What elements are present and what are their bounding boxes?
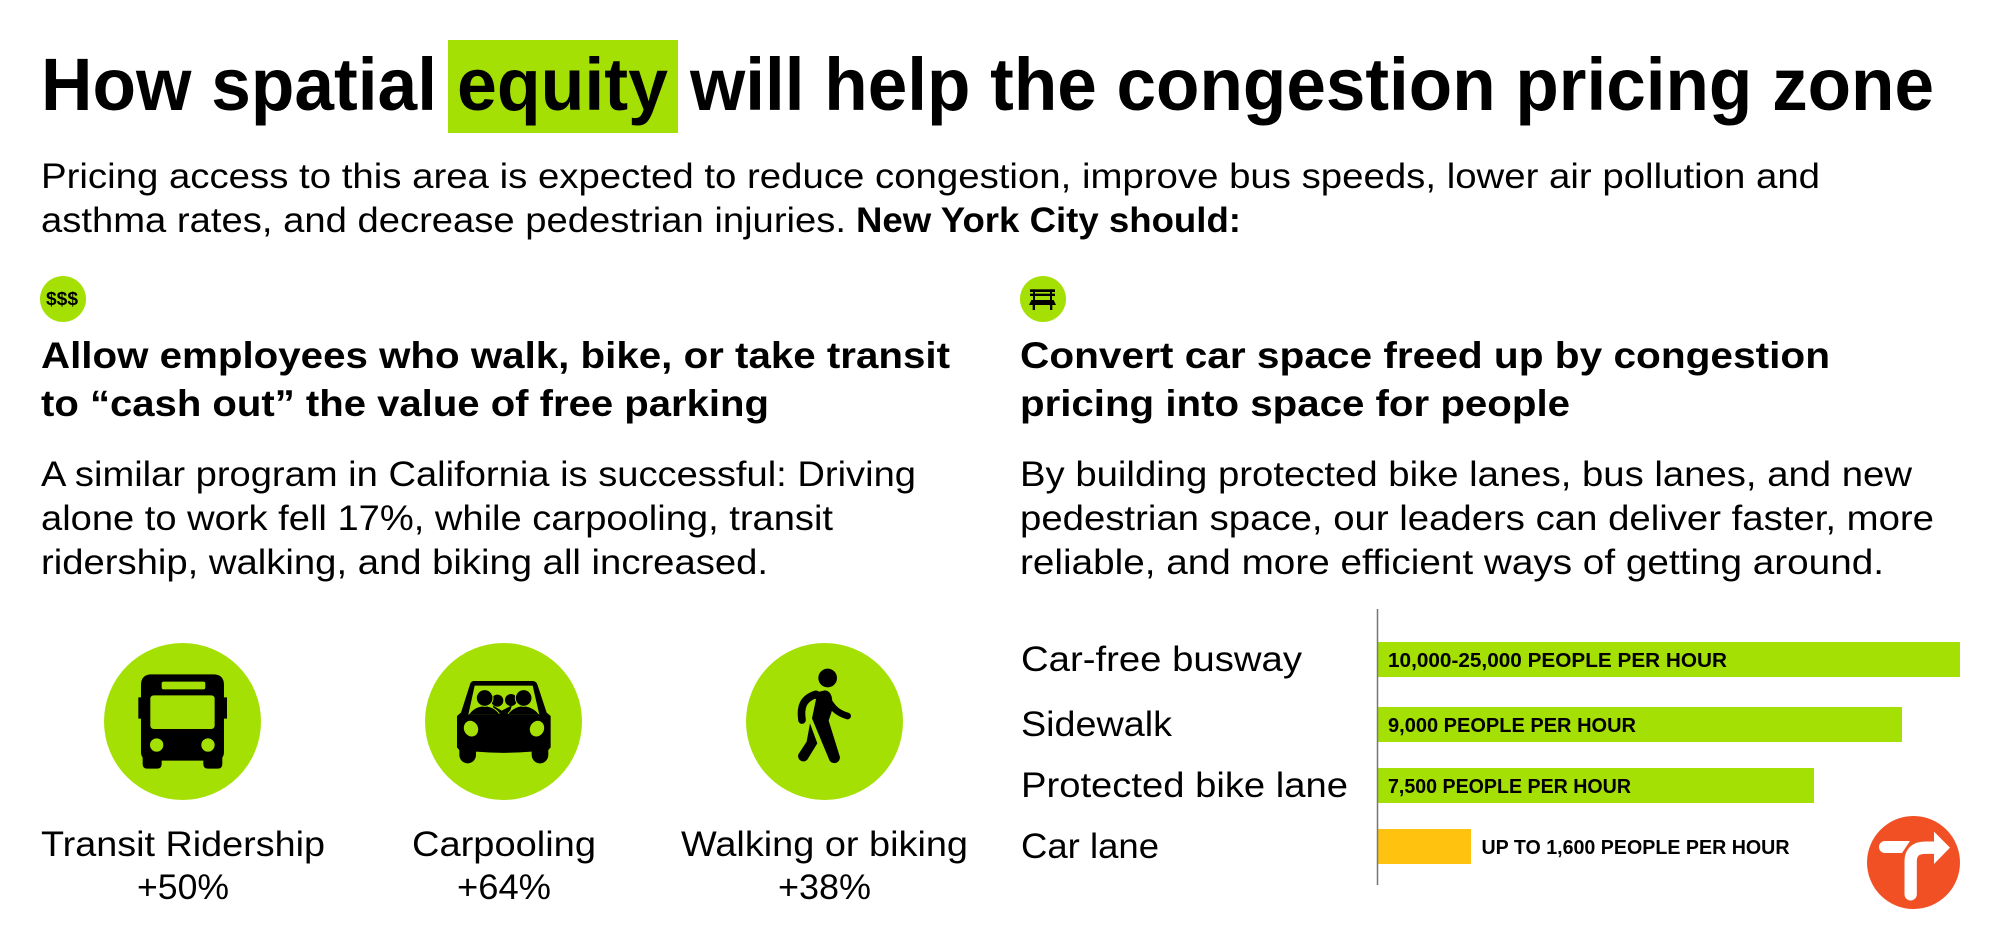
body text: California program: alone to work fell 17%, while carpooling, transit (41, 499, 833, 538)
intro text: New York City should: (856, 201, 1241, 240)
bar chart: people per hour (1021, 609, 1960, 885)
body text: protected lanes (1020, 455, 1934, 582)
icon: walking person (746, 643, 903, 800)
intro text: Pricing access to this area is expected to reduce congestion, improve bus speeds, lower air pollution and (41, 157, 1820, 196)
icon: bench (1020, 276, 1066, 322)
icon: carpool car (425, 643, 582, 800)
chart row: protected bike lane: Protected bike lane (1021, 766, 1348, 805)
icon: bus (104, 643, 261, 800)
title: equity (457, 43, 668, 126)
heading: convert car space: pricing into space for people (1020, 383, 1570, 424)
label: carpooling: +64% (457, 868, 551, 907)
chart row: car lane: Car lane (1021, 827, 1159, 866)
panel: convert car space (1020, 276, 1960, 885)
label: carpooling (412, 825, 596, 907)
heading: cash out (41, 335, 950, 424)
chart row: sidewalk: 9,000 PEOPLE PER HOUR (1388, 715, 1637, 737)
intro text: asthma rates, and decrease pedestrian injuries. (41, 201, 846, 240)
chart row: protected bike lane: 7,500 PEOPLE PER HOUR (1388, 776, 1632, 798)
title: How spatial (41, 43, 437, 126)
intro text (41, 157, 1820, 240)
chart row: car-free busway: Car-free busway (1021, 640, 1303, 679)
label: carpooling: Carpooling (412, 825, 596, 864)
label: transit ridership: Transit Ridership (41, 825, 325, 864)
chart row: sidewalk: Sidewalk (1021, 705, 1173, 744)
chart row: car-free busway: 10,000-25,000 PEOPLE PER HOUR (1388, 650, 1728, 672)
title highlight (448, 40, 678, 133)
heading: convert car space: Convert car space freed up by congestion (1020, 335, 1830, 376)
body text: protected lanes: By building protected bike lanes, bus lanes, and new (1020, 455, 1913, 494)
icon: dollars: $$$ (46, 289, 78, 309)
heading: cash out: to “cash out” the value of free parking (41, 383, 769, 424)
chart row: car lane (1021, 827, 1790, 866)
body text: California program: ridership, walking, and biking all increased. (41, 543, 768, 582)
body text: protected lanes: reliable, and more efficient ways of getting around. (1020, 543, 1884, 582)
panel: cash out parking (40, 276, 968, 907)
chart row: car lane: UP TO 1,600 PEOPLE PER HOUR (1482, 837, 1790, 859)
label: walking or biking (681, 825, 968, 907)
chart row: sidewalk (1021, 705, 1902, 744)
heading: convert car space (1020, 335, 1830, 424)
label: walking or biking: Walking or biking (681, 825, 968, 864)
logo: orange arrow mark (1867, 816, 1960, 909)
label: walking or biking: +38% (778, 868, 871, 907)
body text: protected lanes: pedestrian space, our leaders can deliver faster, more (1020, 499, 1934, 538)
label: transit ridership: +50% (137, 868, 229, 907)
title: will help the congestion pricing zone (689, 43, 1934, 126)
body text: California program: A similar program in California is successful: Driving (41, 455, 916, 494)
label: transit ridership (41, 825, 325, 907)
body text: California program (41, 455, 916, 582)
chart row: car-free busway (1021, 640, 1960, 679)
title (41, 40, 1934, 133)
icon: dollars (40, 276, 86, 322)
heading: cash out: Allow employees who walk, bike, or take transit (41, 335, 950, 376)
chart row: protected bike lane (1021, 766, 1814, 805)
